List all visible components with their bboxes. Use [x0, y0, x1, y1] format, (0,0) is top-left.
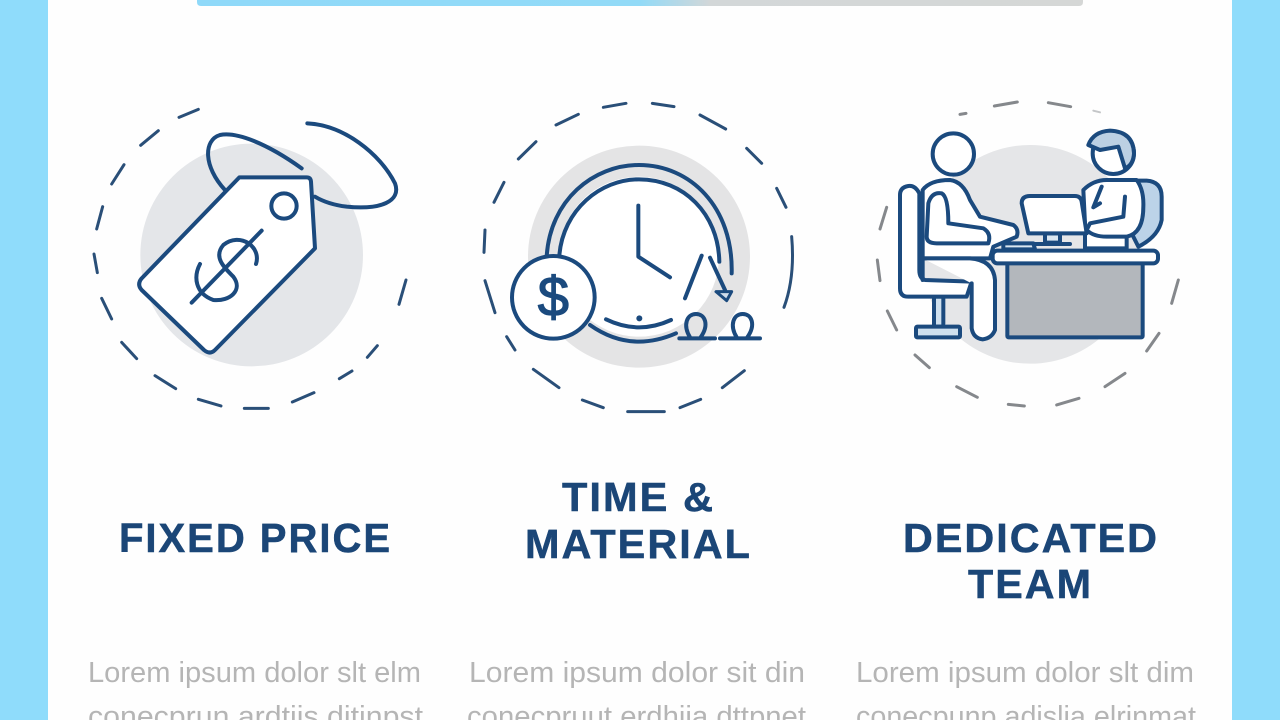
body text: time and material: [467, 657, 806, 720]
desk: [993, 251, 1158, 337]
top accent bar: [197, 0, 1083, 6]
heading: time and material: MATERIAL: [525, 521, 752, 567]
heading: fixed price: FIXED PRICE: [119, 515, 392, 561]
body text: dedicated team: Lorem ipsum dolor slt dim: [856, 657, 1194, 689]
heading: time and material: TIME &: [562, 474, 715, 520]
icon: clock with coin: $: [538, 265, 569, 328]
body text: fixed price: [88, 657, 423, 720]
panel: dedicated team: [856, 102, 1196, 720]
seated client: [923, 133, 1017, 339]
heading: dedicated team: DEDICATED: [903, 515, 1159, 561]
icon: meeting at desk: [877, 102, 1178, 406]
panel: time and material: [467, 103, 806, 720]
body text: fixed price: Lorem ipsum dolor slt elm: [88, 657, 421, 689]
panel: fixed price: [88, 109, 423, 720]
laptop and keyboard: [1003, 196, 1087, 249]
heading: dedicated team: [903, 515, 1159, 607]
heading: dedicated team: TEAM: [968, 561, 1093, 607]
icon: price tag: [94, 109, 406, 408]
adviser with chair back: [1083, 131, 1162, 248]
body text: dedicated team: [856, 657, 1196, 720]
heading: time and material: [525, 474, 752, 567]
body text: time and material: Lorem ipsum dolor sit din: [469, 657, 805, 689]
chair: [900, 186, 972, 337]
icon: clock with coin: [484, 103, 793, 412]
